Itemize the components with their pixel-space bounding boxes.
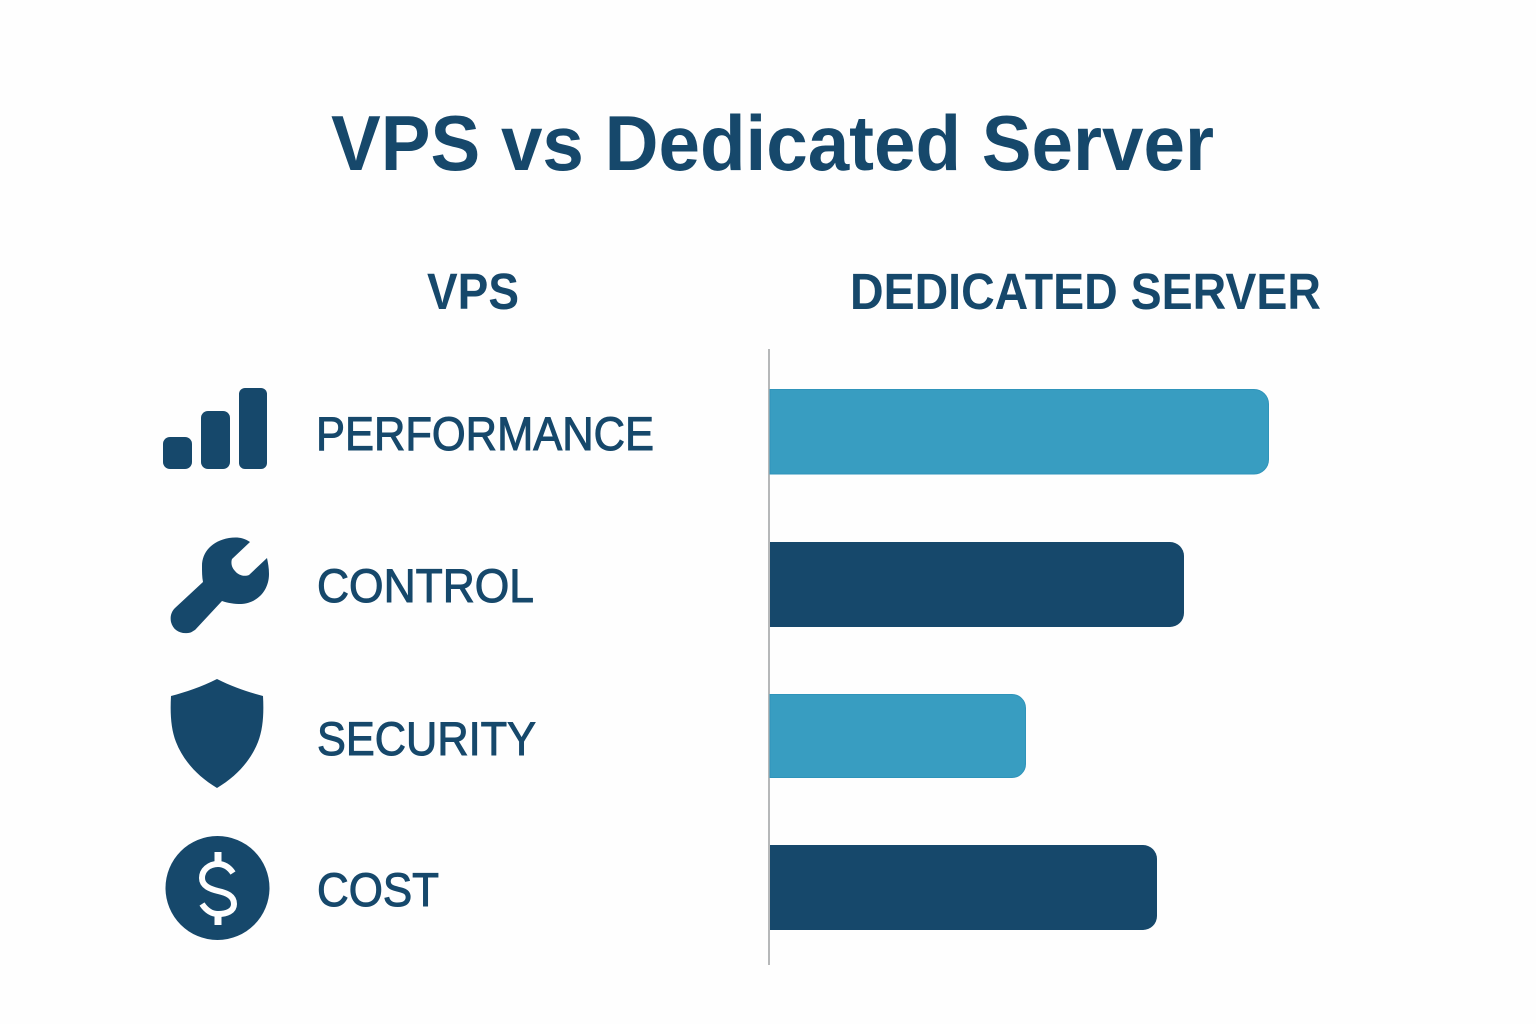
- column heading: dedicated server: DEDICATED SERVER: [850, 263, 1321, 320]
- title: VPS vs Dedicated Server: [331, 99, 1214, 187]
- bar: performance: [770, 390, 1268, 474]
- icon: dollar coin: [166, 836, 270, 940]
- icon: performance bars: [163, 388, 267, 469]
- label: cost: COST: [317, 864, 439, 917]
- label: control: CONTROL: [317, 560, 534, 613]
- bar: cost: [770, 845, 1157, 930]
- bar: security: [770, 694, 1026, 778]
- label: security: SECURITY: [317, 713, 536, 766]
- icon: shield: [171, 679, 263, 788]
- icon: wrench: [171, 537, 269, 633]
- vertical axis: [768, 349, 770, 965]
- column heading: VPS: VPS: [427, 263, 519, 320]
- label: performance: PERFORMANCE: [316, 408, 654, 461]
- bar: control: [770, 542, 1184, 627]
